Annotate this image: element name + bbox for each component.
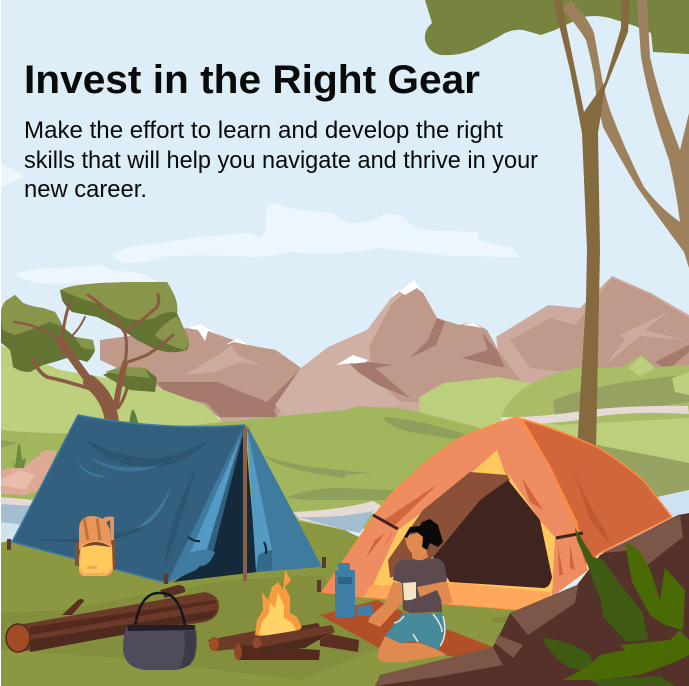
leaves — [542, 528, 689, 686]
left tree — [0, 282, 189, 423]
hair — [404, 519, 443, 550]
top log — [256, 625, 335, 648]
shorts — [385, 613, 447, 650]
tent main — [322, 417, 587, 610]
tent opening — [173, 427, 257, 582]
tent floor strip — [363, 582, 550, 610]
tent dark panel — [522, 419, 672, 567]
rock light facets — [375, 515, 683, 686]
small plant behind tent — [129, 409, 139, 428]
tent side — [247, 425, 322, 572]
big log — [6, 585, 219, 652]
neck and face — [405, 532, 428, 560]
left curtain folds — [366, 484, 438, 558]
body text: skills that will help you navigate and thrive in your — [24, 147, 538, 174]
ties — [373, 515, 583, 538]
shirt — [393, 558, 447, 613]
door dark — [433, 480, 552, 588]
person — [368, 519, 453, 662]
body text: new career. — [24, 176, 147, 203]
body text — [24, 117, 538, 203]
legs — [377, 636, 447, 662]
blue tent — [7, 415, 326, 592]
tent pole — [243, 428, 247, 581]
fire logs — [208, 623, 359, 660]
campfire — [208, 570, 359, 660]
mat — [320, 600, 493, 657]
top right tree — [425, 0, 689, 450]
left arm — [368, 582, 402, 627]
door brown — [388, 472, 510, 578]
right curtain — [497, 418, 587, 597]
light branches — [562, 0, 689, 268]
left tree canopies — [0, 282, 189, 392]
tent pegs — [7, 539, 326, 592]
left tree trunk and branches — [14, 295, 173, 423]
tent creases — [30, 438, 211, 565]
rock — [375, 513, 689, 686]
ground — [0, 520, 520, 686]
canopy — [425, 0, 689, 55]
clouds — [0, 163, 519, 284]
dark trunk — [553, 0, 630, 450]
orange tent — [322, 417, 672, 610]
thermos — [335, 563, 373, 617]
river — [0, 491, 689, 543]
flames — [255, 570, 302, 638]
right arm — [417, 582, 453, 604]
door yellow — [373, 450, 555, 597]
log end — [6, 624, 30, 652]
left flap — [167, 425, 244, 583]
body text: Make the effort to learn and develop the right — [24, 117, 503, 144]
mountains — [100, 276, 689, 432]
hills — [0, 345, 689, 530]
rock and grass left — [0, 444, 57, 495]
mug — [403, 582, 416, 600]
pot — [123, 593, 197, 670]
right flap — [247, 428, 272, 572]
title: Invest in the Right Gear — [24, 58, 480, 102]
backpack — [75, 516, 115, 576]
tent back face — [12, 415, 250, 583]
